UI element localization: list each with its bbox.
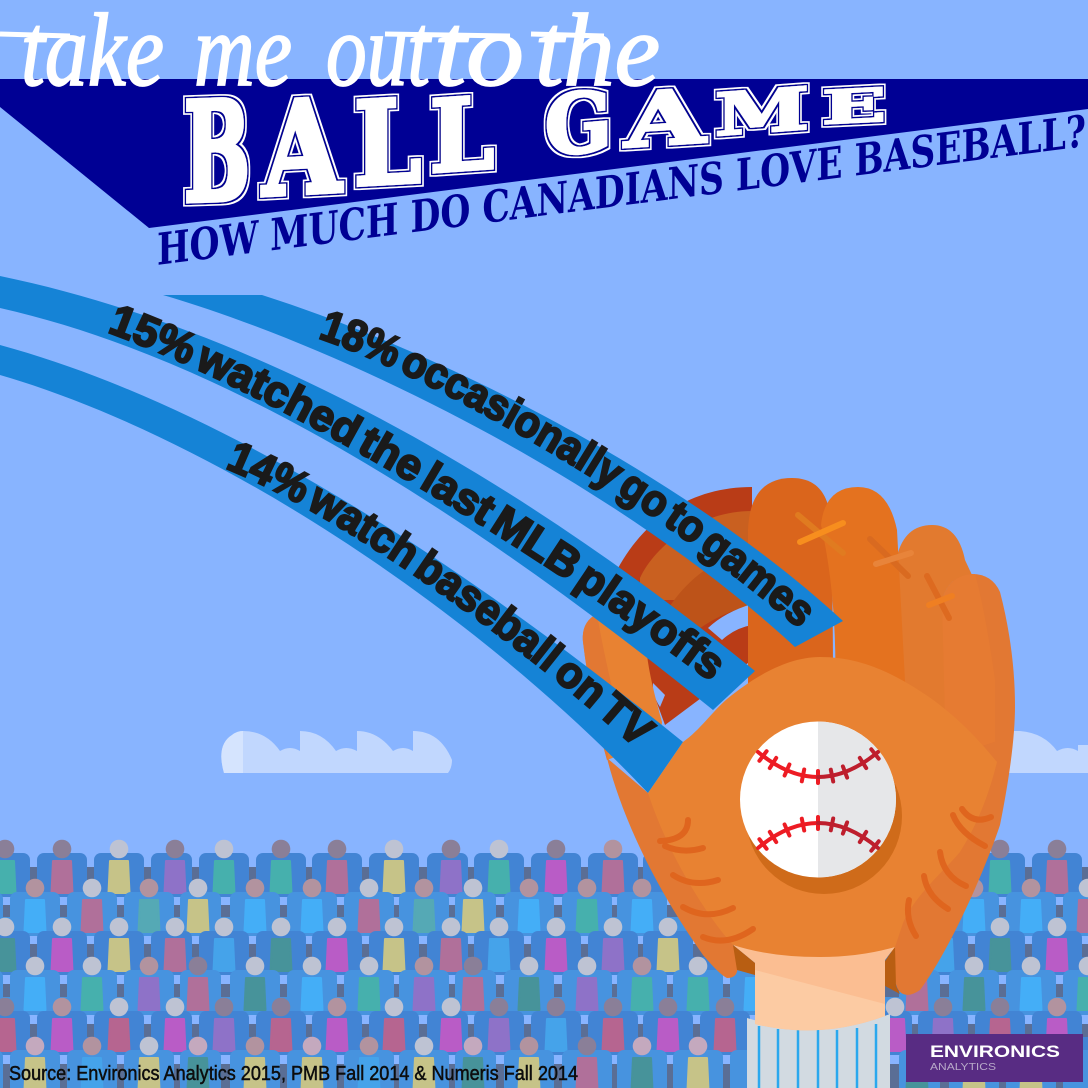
crowd row 3 xyxy=(0,918,1088,975)
glove back: webbing and fingers xyxy=(583,478,1015,995)
cloud left xyxy=(221,731,452,773)
banner: 14% watch baseball on TV xyxy=(0,345,683,793)
baseball xyxy=(740,722,902,894)
logo: Environics Analytics: ANALYTICS xyxy=(930,1061,996,1073)
heading: BALL GAME: L xyxy=(430,75,494,196)
finger 2 xyxy=(821,487,906,700)
crowd xyxy=(0,840,1088,1088)
heading: BALL GAME: A xyxy=(624,74,707,165)
banner: 14% watch baseball on TV: 14% watch baseball on TV xyxy=(226,442,658,743)
heading: BALL GAME xyxy=(184,71,886,234)
glove lower left xyxy=(607,758,738,978)
crowd row 6 xyxy=(0,1037,1088,1088)
hand xyxy=(733,945,900,1030)
sleeve xyxy=(747,1014,890,1088)
glove palm xyxy=(648,657,997,957)
ball stitching bottom xyxy=(758,817,879,851)
banner: 15% watched the last MLB playoffs: 15% watched the last MLB playoffs xyxy=(108,306,722,679)
banner: 18% occasionally go to games: 18% occasionally go to games xyxy=(318,312,812,626)
crowd row 4 xyxy=(0,957,1088,1015)
finger 4 xyxy=(942,574,1015,800)
logo: Environics Analytics xyxy=(906,1034,1083,1082)
finger 3 xyxy=(897,525,990,780)
webbing rings xyxy=(612,487,752,725)
heading: BALL GAME: M xyxy=(715,75,809,150)
crowd row 5 xyxy=(0,998,1088,1055)
finger 1 xyxy=(748,478,833,690)
crowd row 2 xyxy=(0,879,1088,936)
ball stitching top xyxy=(758,749,879,783)
thumb xyxy=(583,614,662,760)
lacing on fingers xyxy=(798,515,952,618)
palm lacing xyxy=(660,809,991,941)
source note: Source: Environics Analytics 2015, PMB Fall 2014 & Numeris Fall 2014 xyxy=(9,1063,578,1085)
finger 4 highlight xyxy=(942,574,995,770)
heading: BALL GAME: G xyxy=(545,73,612,175)
script title: take me out to the xyxy=(0,0,660,108)
cloud right xyxy=(1000,731,1088,773)
logo: Environics Analytics: ENVIRONICS xyxy=(930,1043,1060,1061)
heading: BALL GAME: A xyxy=(262,71,343,226)
crowd row 1 xyxy=(0,840,1088,897)
heading: BALL GAME: B xyxy=(184,71,250,234)
navy title banner xyxy=(0,79,1088,228)
heading: BALL GAME: L xyxy=(354,75,421,213)
glove lower right xyxy=(890,706,1015,995)
heading: BALL GAME: E xyxy=(822,79,886,136)
